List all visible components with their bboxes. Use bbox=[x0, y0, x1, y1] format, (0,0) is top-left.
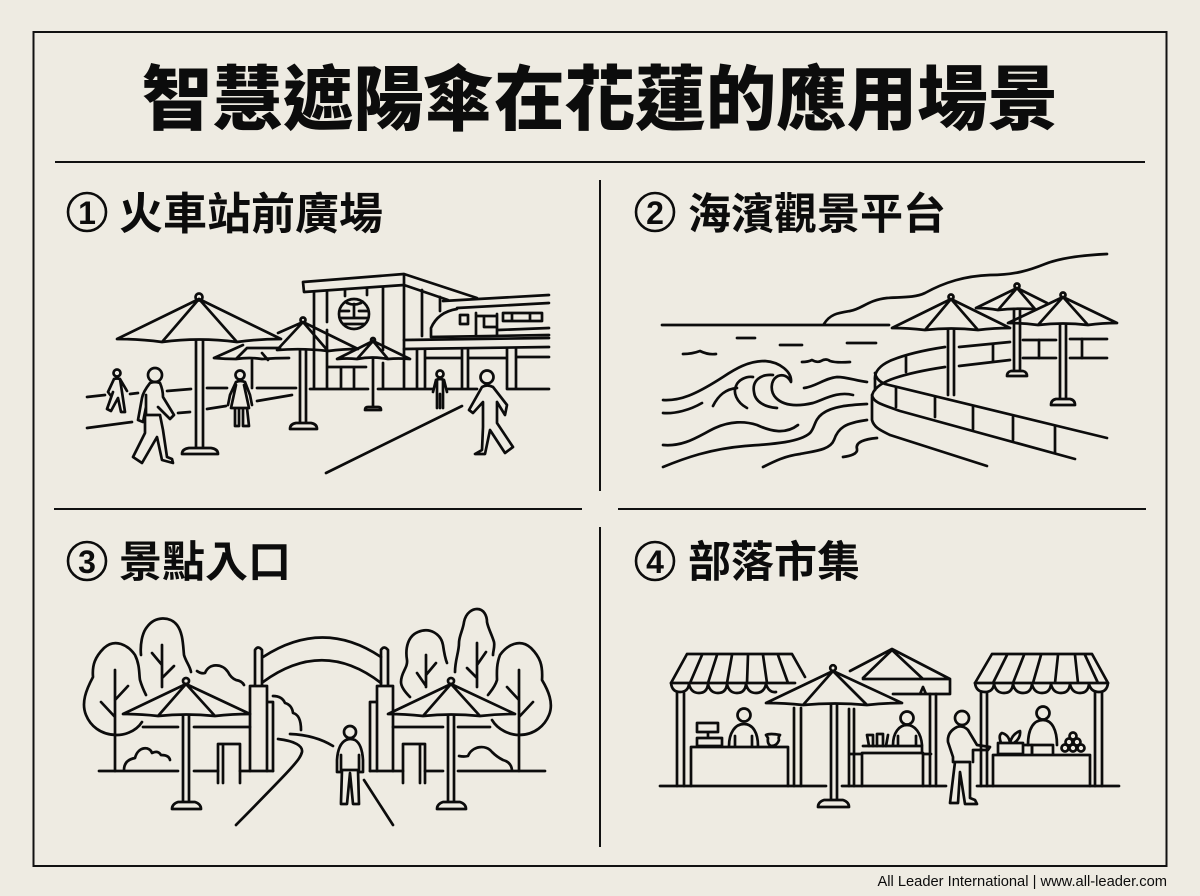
person: small by station bbox=[433, 370, 447, 408]
horizon and mountains bbox=[662, 254, 1107, 325]
panel: train station plaza bbox=[68, 190, 549, 473]
person: walker right bbox=[469, 370, 513, 454]
stall middle tent bbox=[849, 649, 950, 786]
station building bbox=[303, 274, 549, 389]
gate bbox=[218, 638, 425, 783]
heading: 火車站前廣場: 1 bbox=[78, 195, 96, 231]
umbrella left bbox=[892, 294, 1010, 395]
person: dress bbox=[228, 370, 252, 426]
ground and fences bbox=[99, 727, 545, 771]
heading: 海濱觀景平台: 2 bbox=[646, 195, 664, 231]
customer bbox=[948, 711, 990, 804]
umbrella right bbox=[1008, 292, 1117, 405]
trees right bbox=[401, 609, 551, 771]
bushes left bbox=[124, 665, 301, 770]
umbrella 4 bbox=[337, 338, 410, 410]
heading: 部落市集: 部落市集 bbox=[688, 539, 860, 587]
umbrella back bbox=[976, 284, 1047, 376]
train bbox=[431, 295, 549, 337]
heading: 景點入口: 景點入口 bbox=[119, 539, 291, 587]
person: small far left bbox=[107, 370, 127, 412]
panel: seaside viewing platform bbox=[636, 191, 1117, 467]
heading: 海濱觀景平台: 海濱觀景平台 bbox=[688, 191, 946, 239]
road bbox=[236, 734, 393, 825]
seawall railing bbox=[872, 339, 1107, 466]
umbrella right bbox=[388, 678, 515, 809]
plaza paths bbox=[87, 388, 462, 473]
heading: 部落市集: 4 bbox=[646, 544, 664, 580]
stall right bbox=[975, 654, 1108, 786]
umbrella 3 bbox=[277, 318, 358, 429]
stall left bbox=[671, 654, 805, 786]
panel: scenic spot entrance bbox=[68, 539, 551, 825]
umbrella left bbox=[123, 678, 250, 809]
sea waves bbox=[663, 338, 877, 467]
ground bbox=[660, 785, 1119, 787]
person: walker front left bbox=[133, 368, 174, 463]
footer credit: All Leader International | www.all-leader.com bbox=[877, 874, 1167, 890]
bush right bbox=[459, 747, 512, 770]
title: 智慧遮陽傘在花蓮的應用場景 bbox=[142, 60, 1058, 139]
umbrella bbox=[766, 665, 902, 807]
person facing gate bbox=[337, 726, 363, 804]
umbrella 2 bbox=[214, 345, 289, 388]
panel: tribal market bbox=[636, 539, 1119, 807]
heading: 火車站前廣場: 火車站前廣場 bbox=[119, 190, 383, 239]
umbrella 1 bbox=[117, 294, 281, 454]
trees left bbox=[84, 618, 191, 771]
heading: 景點入口: 3 bbox=[78, 544, 96, 580]
